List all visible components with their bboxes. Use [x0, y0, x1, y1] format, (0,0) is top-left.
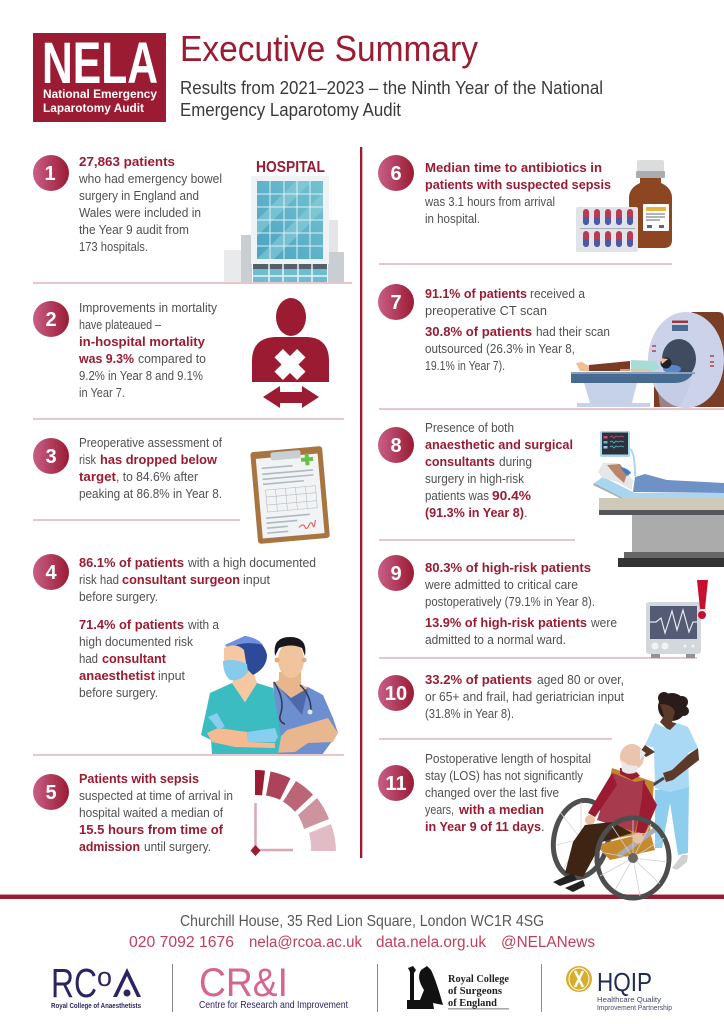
text: item 11: in Year 9 of 11 days: [425, 820, 541, 834]
logo: RCoA: RC: [51, 960, 97, 1006]
text: item 4: risk had: [79, 573, 119, 587]
footer bar: [0, 894, 724, 899]
text: item 2: compared to: [138, 352, 206, 366]
subtitle: Results from 2021–2023 – the Ninth Year of the National: [180, 78, 603, 98]
logo: HQIP: Healthcare Quality: [597, 997, 662, 1004]
icon: surgeon and anaesthetist: [201, 636, 338, 755]
logo: CR&I: Centre for Research and Improvement: [199, 1000, 348, 1011]
text: item 4: with a: [187, 618, 219, 632]
text: item 1: 173 hospitals.: [79, 240, 148, 254]
text: item 3: , to 84.6% after: [116, 470, 198, 484]
text: item 4: 71.4% of patients: [79, 618, 184, 632]
text: item 10: 33.2% of patients: [425, 673, 532, 687]
text: item 6: Median time to antibiotics in: [425, 161, 602, 175]
text: item 5: admission: [79, 840, 140, 854]
badge 6: [378, 155, 414, 191]
badge 8: 8: [390, 435, 402, 457]
text: item 7: [425, 287, 610, 373]
text: item 3: Preoperative assessment of: [79, 436, 222, 450]
text: item 3: risk: [79, 453, 97, 467]
logo: NELA: National Emergency: [43, 87, 157, 101]
logo: NELA: Laparotomy Audit: [43, 101, 144, 115]
text: item 5: Patients with sepsis: [79, 772, 199, 786]
text: item 4: with a high documented: [187, 556, 316, 570]
text: item 4: before surgery.: [79, 590, 158, 604]
footer contacts: data.nela.org.uk: [376, 934, 486, 951]
badge 11: [378, 765, 414, 801]
logo: Royal College of Surgeons: of Surgeons: [448, 985, 503, 997]
text: item 4: input: [243, 573, 270, 587]
logo: CR&I: CR&I: [199, 961, 288, 1005]
text: item 2: was 9.3%: [78, 352, 134, 366]
text: item 8: anaesthetic and surgical: [425, 438, 573, 452]
text: item 4: had: [79, 652, 98, 666]
text: item 6: [424, 161, 611, 226]
text: item 9: were: [590, 616, 617, 630]
text: item 11: years,: [425, 803, 454, 817]
text: item 11: stay (LOS) has not significantly: [425, 769, 584, 783]
text: item 5: suspected at time of arrival in: [79, 789, 233, 803]
logo: RCoA: [51, 960, 141, 1010]
logo: HQIP: HQIP: [597, 967, 652, 997]
text: item 5: [79, 772, 233, 854]
text: item 3: peaking at 86.8% in Year 8.: [79, 487, 222, 501]
text: item 1: [78, 155, 222, 254]
text: item 7: preoperative CT scan: [425, 304, 547, 318]
icon: hospital: HOSPITAL: [256, 159, 325, 176]
badge 7: [378, 284, 414, 320]
text: item 11: with a median: [458, 803, 544, 817]
text: item 11: changed over the last five: [425, 786, 559, 800]
panel: item 7 CT scan: [378, 284, 610, 373]
text: item 8: consultants: [425, 455, 495, 469]
text: item 5: hospital waited a median of: [79, 806, 223, 820]
text: item 4: input: [158, 669, 185, 683]
badge 5: [33, 774, 69, 810]
icon: medicine bottle and blister pack: [576, 160, 672, 252]
subtitle: [180, 78, 603, 120]
badge 8: [378, 427, 414, 463]
text: item 4: 86.1% of patients: [79, 556, 184, 570]
badge 4: 4: [45, 562, 57, 584]
text: item 7: 19.1% in Year 7).: [425, 359, 505, 373]
text: item 6: patients with suspected sepsis: [425, 178, 611, 192]
text: item 9: [424, 561, 617, 647]
icon: hospital: [224, 159, 344, 283]
badge 4: [33, 554, 69, 590]
footer contacts: nela@rcoa.ac.uk: [249, 934, 362, 951]
text: item 9: 80.3% of high-risk patients: [425, 561, 591, 575]
badge 1: [33, 155, 69, 191]
badge 6: 6: [390, 163, 402, 185]
logo: Royal College of Surgeons: [407, 966, 509, 1009]
panel: item 9 critical care: [378, 555, 617, 647]
text: item 9: were admitted to critical care: [424, 578, 578, 592]
footer contacts: [129, 934, 595, 951]
logo: CR&I: [199, 961, 348, 1011]
logo: Royal College of Surgeons: of England: [448, 997, 497, 1009]
text: item 1: the Year 9 audit from: [79, 223, 189, 237]
panel: item 8 consultants present: [0, 421, 724, 1012]
text: item 10: or 65+ and frail, had geriatrician input: [425, 690, 624, 704]
text: item 11: .: [541, 820, 544, 834]
footer contacts: @NELANews: [501, 934, 595, 951]
subtitle: Emergency Laparotomy Audit: [180, 100, 401, 120]
text: item 2: have plateaued –: [79, 318, 161, 332]
text: item 3: has dropped below: [100, 453, 217, 467]
text: item 2: Improvements in mortality: [79, 301, 218, 315]
text: item 10: aged 80 or over,: [537, 673, 624, 687]
badge 5: 5: [45, 782, 57, 804]
badge 11: 11: [385, 773, 407, 795]
badge 1: 1: [44, 163, 56, 185]
text: item 8: patients was: [425, 489, 489, 503]
icon: clock segments: [250, 770, 336, 856]
text: item 4: anaesthetist: [79, 669, 156, 683]
text: item 1: Wales were included in: [79, 206, 201, 220]
text: item 7: 91.1% of patients: [425, 287, 527, 301]
logo: RCoA: Royal College of Anaesthetists: [51, 1003, 141, 1010]
text: item 10: [425, 673, 624, 721]
text: item 8: during: [499, 455, 532, 469]
panel: item 2 mortality: [33, 298, 329, 408]
text: item 1: who had emergency bowel: [78, 172, 222, 186]
text: item 2: in-hospital mortality: [79, 335, 205, 349]
title: Executive Summary: [180, 28, 478, 69]
text: item 11: Postoperative length of hospital: [425, 752, 591, 766]
text: item 9: postoperatively (79.1% in Year 8).: [425, 595, 595, 609]
badge 3: [33, 438, 69, 474]
icon: clipboard: [250, 446, 330, 544]
text: item 3: [79, 436, 222, 501]
panel: item 3 risk assessment: [33, 436, 330, 544]
text: item 1: 27,863 patients: [79, 155, 175, 169]
text: item 7: outsourced (26.3% in Year 8,: [425, 342, 575, 356]
text: item 4: [79, 556, 316, 700]
text: item 2: in Year 7.: [79, 386, 125, 400]
text: item 11: [425, 752, 591, 834]
text: item 8: 90.4%: [492, 489, 531, 503]
logo: HQIP: [566, 966, 672, 1012]
text: item 8: (91.3% in Year 8): [425, 506, 524, 520]
icon: nurse pushing wheelchair: [546, 692, 699, 898]
badge 2: 2: [45, 309, 57, 331]
panel: item 6 antibiotics: [378, 155, 672, 252]
text: item 4: high documented risk: [79, 635, 194, 649]
text: item 2: 9.2% in Year 8 and 9.1%: [79, 369, 203, 383]
text: item 4: consultant surgeon: [122, 573, 240, 587]
text: item 8: [425, 421, 573, 520]
text: item 8: .: [524, 506, 528, 520]
text: item 1: surgery in England and: [79, 189, 199, 203]
badge 10: [378, 675, 414, 711]
text: item 2: [78, 301, 218, 400]
logo: NELA: NELA: [42, 31, 158, 96]
text: item 5: 15.5 hours from time of: [79, 823, 224, 837]
footer address: Churchill House, 35 Red Lion Square, London WC1R 4SG: [180, 913, 544, 930]
icon: CT scanner with patient: [571, 312, 724, 408]
logo: Royal College of Surgeons: Royal College: [448, 973, 509, 985]
icon: patient on operating table with monitor: [593, 431, 724, 567]
text: item 7: received a: [530, 287, 585, 301]
badge 10: 10: [385, 683, 407, 705]
panel: item 4 consultant input: [33, 554, 338, 755]
text: item 10: (31.8% in Year 8).: [425, 707, 514, 721]
logo: HQIP: Improvement Partnership: [597, 1005, 672, 1012]
badge 9: [378, 555, 414, 591]
logo: RCoA: o: [97, 962, 112, 992]
panel: item 5 sepsis time: [33, 770, 336, 856]
text: item 6: in hospital.: [425, 212, 480, 226]
panel: item 1 patients: [33, 155, 344, 283]
text: item 8: surgery in high-risk: [425, 472, 525, 486]
text: item 4: consultant: [102, 652, 167, 666]
footer contacts: 020 7092 1676: [129, 934, 234, 951]
text: item 6: was 3.1 hours from arrival: [424, 195, 555, 209]
badge 9: 9: [390, 563, 402, 585]
badge 3: 3: [45, 446, 57, 468]
text: item 5: until surgery.: [144, 840, 211, 854]
text: item 3: target: [79, 470, 117, 484]
icon: vital signs monitor with alert: [646, 580, 708, 658]
text: item 7: 30.8% of patients: [425, 325, 532, 339]
badge 2: [33, 301, 69, 337]
logo: NELA: [33, 31, 166, 122]
icon: patient with cross and arrow: [252, 298, 329, 408]
text: item 7: had their scan: [536, 325, 610, 339]
panel: item 10 geriatrician input: [378, 673, 624, 721]
text: item 8: Presence of both: [425, 421, 514, 435]
panel: item 11 length of stay: [378, 752, 591, 834]
text: item 4: before surgery.: [79, 686, 158, 700]
badge 7: 7: [390, 292, 402, 314]
text: item 9: admitted to a normal ward.: [425, 633, 566, 647]
text: item 9: 13.9% of high-risk patients: [425, 616, 587, 630]
